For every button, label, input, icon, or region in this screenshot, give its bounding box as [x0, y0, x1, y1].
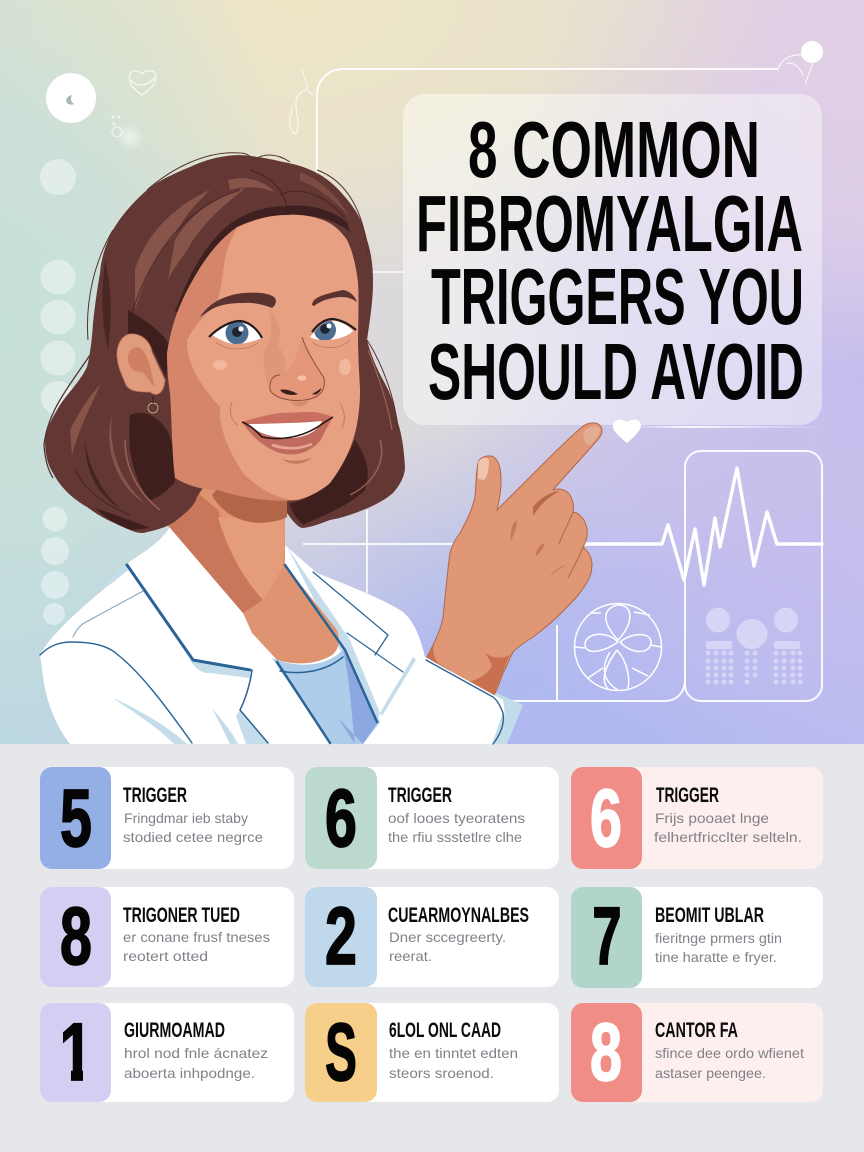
cheek highlights [213, 359, 351, 375]
card: row 3 column 3: astaser peengee. [655, 1065, 766, 1081]
title [416, 105, 804, 416]
icon: white circle badge [46, 73, 96, 123]
card: row 1 column 2: the rfiu ssstetlre clhe [388, 829, 522, 845]
icon: ball ornament top right [778, 41, 823, 84]
card: row 1 column 3: TRIGGER [656, 784, 719, 807]
card: row 1 column 3 [571, 767, 823, 869]
card: row 2 column 3: 7 [592, 890, 622, 982]
card: row 1 column 2: TRIGGER [388, 784, 452, 807]
hair dark lower [85, 260, 368, 530]
smile creases [230, 402, 344, 428]
icon: small sparkle bubbles [112, 116, 144, 151]
background panel lines [303, 451, 822, 701]
hair back [45, 155, 405, 533]
card: row 2 column 3: tine haratte e fryer. [655, 949, 777, 965]
hair light streaks [70, 172, 350, 503]
card: row 1 column 1 [40, 767, 294, 869]
decorative dots column [40, 159, 76, 625]
hair dark strands [75, 170, 345, 515]
lab coat [40, 527, 504, 744]
card: row 3 column 3: 8 [590, 1006, 622, 1097]
card: row 3 column 2 [305, 1003, 559, 1102]
face light area [187, 215, 360, 500]
icon: three figures with dot grids [706, 608, 802, 684]
right eye [310, 319, 356, 348]
card: row 3 column 2: steors sroenod. [389, 1065, 494, 1081]
frame lines behind title [317, 69, 778, 272]
card: row 2 column 1: er conane frusf tneses [123, 929, 270, 945]
stray hairs [44, 153, 398, 478]
coat shadows [100, 547, 507, 744]
hand pointing [427, 423, 602, 697]
card: row 3 column 3 [571, 1003, 823, 1102]
card: row 1 column 1: stodied cetee negrce [123, 829, 263, 845]
card: row 3 column 1: GIURMOAMAD [124, 1019, 225, 1042]
card: row 1 column 2 [305, 767, 559, 869]
card: row 2 column 3: BEOMIT UBLAR [655, 904, 764, 927]
card: row 1 column 3: felhertfricclter selteln. [654, 829, 802, 845]
neck shadow [165, 478, 263, 613]
mouth [242, 412, 333, 464]
card: row 3 column 3: sfince dee ordo wfienet [655, 1045, 804, 1061]
card: row 1 column 3: Frijs pooaet lnge [655, 810, 769, 826]
card: row 1 column 1: TRIGGER [123, 784, 187, 807]
shirt [272, 650, 380, 744]
title panel [403, 94, 822, 425]
glow line under title panel [630, 426, 825, 428]
card: row 1 column 1: Fringdmar ieb staby [124, 810, 248, 826]
eyebrows [200, 290, 357, 317]
neck and chest [165, 478, 339, 663]
coat lines [40, 565, 503, 744]
card: row 2 column 2: CUEARMOYNALBES [388, 904, 529, 927]
card: row 3 column 3: CANTOR FA [655, 1019, 738, 1042]
hair hairline shadow [175, 206, 350, 312]
card: row 2 column 2: 2 [325, 890, 357, 981]
card: row 1 column 1: 5 [60, 772, 92, 863]
card: row 3 column 2: 6LOL ONL CAAD [389, 1019, 501, 1042]
card: row 3 column 1: hrol nod fnle ácnatez [124, 1045, 268, 1061]
card: row 3 column 1: aboerta inhpodnge. [124, 1065, 255, 1081]
nose side shading [264, 308, 285, 386]
card: row 2 column 3 [571, 887, 823, 988]
card: row 1 column 2: 6 [325, 772, 357, 863]
hero gradient background [0, 0, 864, 744]
ear [117, 334, 165, 413]
card: row 2 column 1 [40, 887, 294, 987]
card: row 3 column 2: the en tinntet edten [389, 1045, 518, 1061]
icon: heart outline [129, 71, 156, 95]
card: row 2 column 1: TRIGONER TUED [123, 904, 240, 927]
sleeve cuff shadow [480, 690, 523, 744]
icon: flower in circle [574, 604, 662, 690]
left eye [209, 321, 262, 349]
card: row 2 column 2: reerat. [389, 948, 432, 964]
illustration: doctor [40, 153, 602, 744]
card: row 3 column 1 [40, 1003, 294, 1102]
face base [167, 215, 360, 501]
card: row 3 column 1: 1 [60, 1007, 92, 1098]
icon: white heart [613, 420, 641, 443]
chart: ECG pulse line [583, 468, 822, 585]
card: row 2 column 1: reotert otted [123, 948, 208, 964]
grid of trigger cards [40, 767, 823, 1102]
card: row 1 column 3: 6 [590, 772, 622, 863]
icon: ornament near frame [290, 68, 313, 134]
card: row 2 column 2 [305, 887, 559, 987]
card: row 1 column 2: oof looes tyeoratens [388, 810, 525, 826]
card: row 2 column 1: 8 [60, 890, 92, 981]
nose [270, 337, 324, 406]
card: row 2 column 2: Dner sccegreerty. [389, 929, 506, 945]
card: row 2 column 3: fieritnge prmers gtin [655, 930, 782, 946]
card: row 3 column 2: S [325, 1007, 357, 1098]
